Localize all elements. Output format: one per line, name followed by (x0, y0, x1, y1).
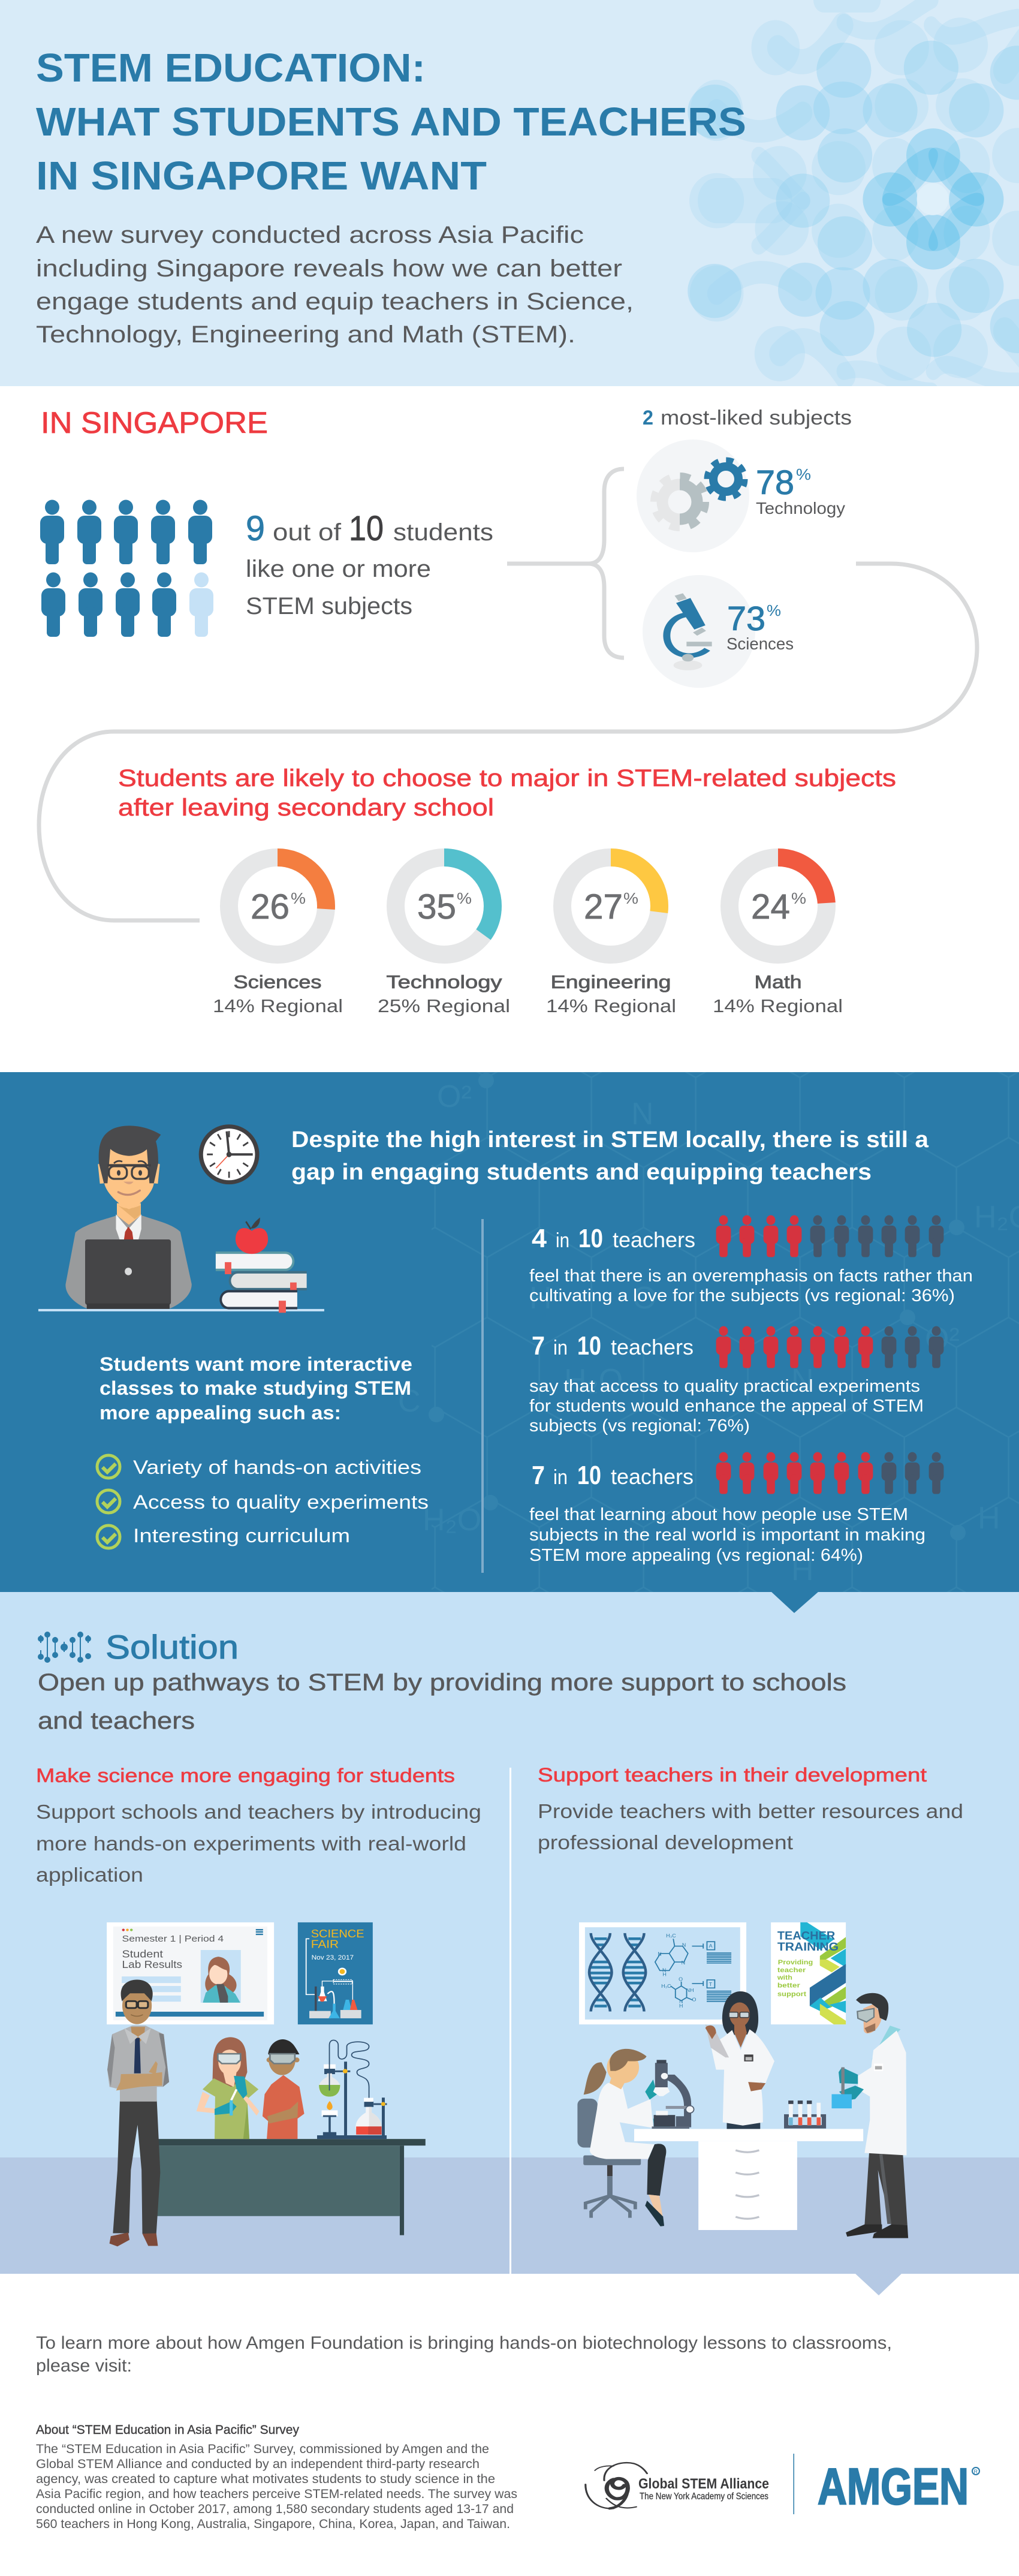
text: learn more: please visit: (36, 2356, 132, 2376)
donut chart: sciences: Sciences (234, 971, 321, 992)
text: about survey: The “STEM Education in Asia Pacific” Survey, commissioned by Amgen and the (36, 2442, 489, 2456)
molecule diagrams (655, 1933, 731, 2009)
donut chart: technology: Technology (386, 971, 502, 992)
column: teachers: Support teachers in their development (538, 1764, 927, 1786)
stat: 4 in 10 teachers: cultivating a love for the subjects (vs regional: 36%) (529, 1286, 955, 1305)
teacher: man with crossed arms (107, 1979, 169, 2246)
stat: 7 in 10 teachers, experiments: teachers (611, 1335, 694, 1359)
text: students want more: classes to make studying STEM (100, 1377, 411, 1399)
donut chart: engineering: 14% Regional (546, 995, 676, 1016)
lab table (157, 2139, 426, 2235)
sciences stat (643, 575, 794, 688)
stat: 4 in 10 teachers: 4 (532, 1224, 547, 1253)
sciences stat: % (767, 601, 781, 619)
molecule diagrams: N (682, 1942, 686, 1948)
text: about survey: Global STEM Alliance and conducted by an independent third-party research (36, 2457, 480, 2471)
heading: gap: gap in engaging students and equipping teachers (291, 1160, 872, 1185)
stat: 7 in 10 teachers, experiments: for students would enhance the appeal of STEM (529, 1397, 924, 1416)
column: teachers: Provide teachers with better resources and (538, 1800, 963, 1822)
science fair poster: Nov 23, 2017 (312, 1953, 354, 1961)
decorative chemistry background: O (632, 1281, 656, 1316)
stat: 4 in 10 teachers (529, 1215, 973, 1305)
panel: in Singapore (39, 406, 977, 1016)
lab results board (107, 1922, 274, 2024)
title: STEM EDUCATION: (36, 46, 426, 91)
decorative chemistry background: H (978, 1501, 1000, 1536)
donut chart: math: Math (754, 971, 802, 992)
technology stat: % (796, 465, 811, 483)
donut chart: sciences: 14% Regional (213, 995, 343, 1016)
text: students want more: Students want more interactive (100, 1353, 412, 1375)
donut chart: engineering (546, 857, 676, 1016)
stat: 9 out of 10 students: students (393, 519, 493, 546)
lab results board: Student (122, 1948, 163, 1960)
molecule diagrams: NH (686, 1987, 694, 1993)
intro text: A new survey conducted across Asia Pacific (36, 222, 584, 248)
molecule diagrams: O (692, 1997, 697, 2002)
intro text: engage students and equip teachers in Science, (36, 288, 634, 315)
stat: 7 in 10 teachers, real world: in (553, 1466, 568, 1489)
icon: microscope (667, 593, 712, 670)
heading: likely to major: Students are likely to choose to major in STEM-related subjects (118, 765, 896, 792)
molecule diagrams: H (679, 2003, 683, 2009)
decorative chemistry background (398, 1072, 1019, 1592)
stat: 9 out of 10 students: 10 (349, 509, 384, 548)
checklist: Variety of hands-on activities (133, 1456, 421, 1478)
donut chart: math (713, 857, 843, 1016)
column: teachers (538, 1764, 963, 1853)
connector brace (507, 469, 624, 658)
donut chart: sciences: 26 (251, 887, 290, 926)
stat: 7 in 10 teachers, experiments: in (553, 1337, 568, 1359)
stat: 7 in 10 teachers, real world: feel that learning about how people use STEM (529, 1505, 908, 1524)
stat: 7 in 10 teachers, experiments: 7 (532, 1331, 545, 1361)
subheading: Open up pathways to STEM by providing more support to schools (38, 1669, 846, 1696)
text: about survey (36, 2423, 517, 2531)
logo: Global STEM Alliance: The New York Academy of Sciences (640, 2491, 768, 2502)
stat: 7 in 10 teachers, experiments: say that access to quality practical experiments (529, 1377, 920, 1396)
icon: books and apple (216, 1217, 307, 1313)
decorative chemistry background: H₂O (423, 1503, 481, 1537)
stat: 7 in 10 teachers, experiments (529, 1326, 943, 1436)
stat: 9 out of 10 students: out of (273, 519, 342, 546)
sciences stat: 73 (727, 600, 765, 638)
molecule diagrams: O (679, 1976, 683, 1982)
technology stat: Technology (756, 499, 845, 517)
decorative chemistry background: O² (925, 1322, 960, 1356)
student: boy (263, 2039, 305, 2139)
molecule diagrams: H₃C (666, 1933, 676, 1939)
teacher training poster: TEACHER (777, 1930, 836, 1942)
intro text: including Singapore reveals how we can better (36, 255, 622, 282)
intro text: Technology, Engineering and Math (STEM). (36, 321, 575, 348)
heading: in Singapore: IN SINGAPORE (41, 406, 268, 440)
stat: 7 in 10 teachers, real world: teachers (611, 1464, 694, 1489)
stat: 9 out of 10 students: 9 (246, 509, 265, 548)
teacher training poster: with (777, 1973, 792, 1981)
logo: Amgen: R (973, 2469, 978, 2475)
most liked heading: 2 (643, 407, 653, 429)
science fair poster: SCIENCE (311, 1928, 364, 1940)
donut chart: technology: 35 (417, 887, 456, 926)
icon: swirl (586, 2463, 647, 2508)
lab results board: Semester 1 | Period 4 (122, 1934, 224, 1944)
stat: 4 in 10 teachers: in (556, 1229, 569, 1252)
panel: the gap (0, 1072, 1019, 1613)
donut chart: engineering: % (623, 889, 638, 907)
teacher training poster: better (777, 1981, 800, 1989)
decorative molecule pattern (688, 0, 1019, 392)
donut chart: math: % (791, 889, 806, 907)
teacher training poster: TRAINING (777, 1941, 839, 1954)
science fair poster: FAIR (311, 1938, 339, 1951)
heading: likely to major: after leaving secondary school (118, 795, 494, 821)
stat: 7 in 10 teachers, real world: 7 (532, 1461, 545, 1490)
donut chart: sciences (213, 857, 343, 1016)
panel: solution background (0, 1592, 1019, 2274)
stat: 7 in 10 teachers, real world: STEM more appealing (vs regional: 64%) (529, 1546, 863, 1565)
column: students (36, 1765, 481, 1886)
subheading: and teachers (38, 1708, 195, 1734)
technology stat (637, 440, 845, 552)
text: students want more (100, 1353, 412, 1424)
molecule diagrams: N (682, 1960, 685, 1966)
checklist (97, 1455, 429, 1548)
logo: Global STEM Alliance: Global STEM Alliance (638, 2476, 769, 2492)
scientist: standing woman (706, 1991, 774, 2129)
icon: clock (199, 1124, 260, 1184)
lab bench (634, 2129, 863, 2230)
technology stat: 78 (756, 464, 794, 502)
checklist: Access to quality experiments (133, 1491, 429, 1513)
subheading (38, 1669, 846, 1734)
logo: Amgen: AMGEN (818, 2458, 969, 2515)
stat: 4 in 10 teachers: feel that there is an overemphasis on facts rather than (529, 1266, 973, 1286)
decorative chemistry background: O² (437, 1079, 472, 1114)
lab apparatus (317, 2040, 387, 2139)
icon: 7 of 10 teachers (716, 1452, 943, 1494)
stat: 9 out of 10 students (246, 509, 493, 619)
text: about survey: Asia Pacific region, and how teachers perceive STEM-related needs. The survey was (36, 2487, 517, 2501)
decorative chemistry background: H₂O (564, 1363, 623, 1398)
teacher training poster: support (777, 1990, 806, 1998)
icon: 4 of 10 teachers (716, 1215, 943, 1257)
teacher head (98, 1126, 161, 1225)
decorative chemistry background: H (529, 1281, 552, 1316)
sciences stat: Sciences (726, 634, 794, 653)
decorative chemistry background: H (791, 1552, 814, 1587)
connector path (39, 564, 977, 920)
logo: Global STEM Alliance (586, 2463, 769, 2508)
decorative chemistry background: C (398, 1384, 421, 1419)
text: learn more (36, 2333, 892, 2376)
stat: 9 out of 10 students: like one or more (246, 556, 431, 582)
molecule diagrams: A (709, 1943, 713, 1949)
donut chart: technology: % (457, 889, 472, 907)
student: girl (197, 2037, 260, 2139)
donut chart: technology: 25% Regional (378, 995, 510, 1016)
heading: gap: Despite the high interest in STEM locally, there is still a (291, 1127, 929, 1152)
icon: gears (654, 461, 744, 528)
title: WHAT STUDENTS AND TEACHERS (36, 100, 746, 145)
text: about survey: agency, was created to capture what motivates students to study science in the (36, 2472, 495, 2486)
column: students: application (36, 1864, 143, 1886)
stat: 7 in 10 teachers, real world: subjects in the real world is important in making (529, 1525, 925, 1545)
text: about survey: 560 teachers in Hong Kong, Australia, Singapore, China, Korea, Japan, and Taiwan. (36, 2517, 510, 2531)
stat: 9 out of 10 students: STEM subjects (246, 593, 412, 619)
donut chart: math: 24 (751, 887, 790, 926)
scientist: seated woman (577, 2049, 674, 2226)
illustration: teacher at laptop (38, 1124, 324, 1313)
teacher training poster (771, 1922, 846, 2024)
teacher training poster: Providing (778, 1958, 813, 1966)
text: learn more: To learn more about how Amgen Foundation is bringing hands-on biotechnology lessons to classrooms, (36, 2333, 892, 2353)
microscope (652, 2060, 694, 2129)
molecule diagrams: N (662, 1967, 666, 1973)
stat: 7 in 10 teachers, experiments: subjects (vs regional: 76%) (529, 1416, 750, 1436)
donut chart: engineering: Engineering (550, 971, 671, 992)
icon: solution molecule (38, 1632, 91, 1663)
title: IN SINGAPORE WANT (36, 154, 487, 198)
icon: 9 of 10 students (40, 500, 213, 637)
icon: teacher (65, 1126, 192, 1310)
scientist: standing man (831, 1993, 908, 2238)
heading: solution: Solution (105, 1628, 239, 1666)
donut chart: sciences: % (291, 889, 306, 907)
molecule diagrams: H₃C (661, 1983, 671, 1989)
donut chart: engineering: 27 (584, 887, 623, 926)
science fair poster (298, 1922, 373, 2024)
stat: 7 in 10 teachers, experiments: 10 (577, 1331, 601, 1361)
checklist: Interesting curriculum (133, 1525, 350, 1546)
molecule diagrams: H (662, 1972, 667, 1978)
stat: 7 in 10 teachers, real world (529, 1452, 943, 1565)
teacher training poster: teacher (777, 1966, 806, 1974)
icon: DNA helices (589, 1933, 646, 2012)
molecule diagrams: N (679, 1999, 683, 2005)
decorative chemistry background: N (791, 1363, 814, 1398)
icon: 7 of 10 teachers (716, 1326, 943, 1368)
test tube rack (784, 2100, 826, 2129)
decorative chemistry background: N (631, 1097, 654, 1131)
column: students: more hands-on experiments with real-world (36, 1832, 466, 1855)
stat: 4 in 10 teachers: teachers (613, 1227, 695, 1252)
column: students: Support schools and teachers by introducing (36, 1801, 481, 1823)
heading: likely to major (118, 765, 896, 821)
stat: 4 in 10 teachers: 10 (578, 1224, 603, 1253)
donut chart: math: 14% Regional (713, 995, 843, 1016)
text: about survey: About “STEM Education in Asia Pacific” Survey (36, 2423, 299, 2437)
illustration: teachers in lab (577, 1922, 908, 2238)
molecule diagrams: T (709, 1981, 713, 1987)
illustration: classroom (107, 1922, 426, 2246)
panel: footer (36, 2333, 979, 2531)
most liked heading: most-liked subjects (661, 407, 852, 429)
column: teachers: professional development (538, 1831, 793, 1853)
intro text (36, 222, 634, 348)
panel: header (0, 0, 1019, 392)
stat: 7 in 10 teachers, real world: 10 (577, 1461, 601, 1490)
panel: solution (0, 1628, 1019, 2295)
donut chart: technology (378, 857, 510, 1016)
text: students want more: more appealing such as: (100, 1402, 341, 1424)
molecule diagrams: N (658, 1951, 662, 1957)
column: students: Make science more engaging for students (36, 1765, 455, 1786)
DNA board (579, 1922, 746, 2024)
lab results board: Lab Results (122, 1959, 182, 1970)
heading: gap (291, 1127, 929, 1185)
title (36, 46, 746, 198)
text: about survey: conducted online in October 2017, among 1,580 secondary students aged 13-17 and (36, 2502, 514, 2516)
